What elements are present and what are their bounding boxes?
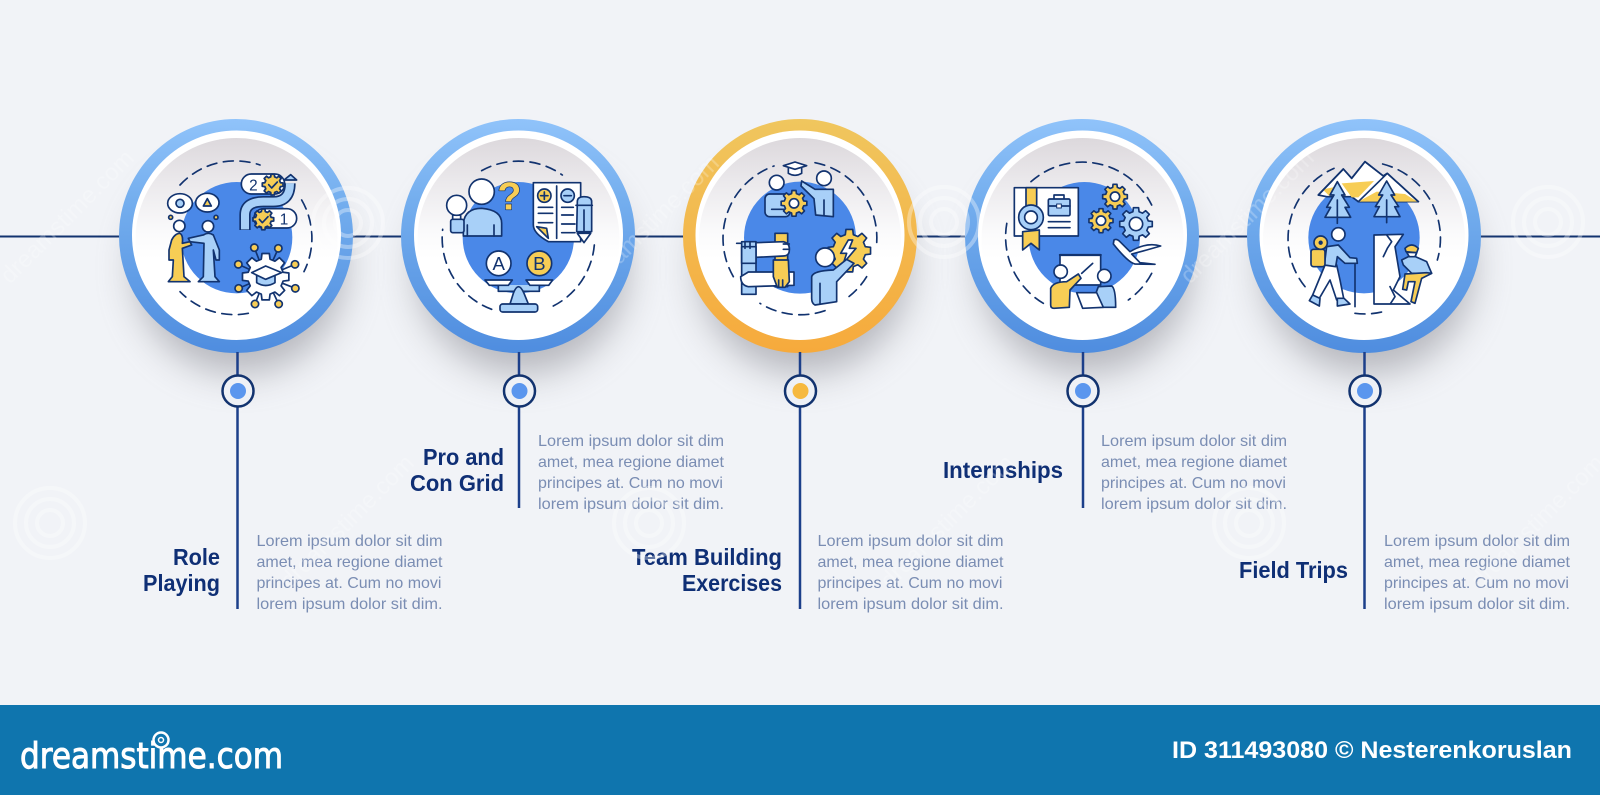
panel: internships xyxy=(943,119,1288,513)
logo: dreamstime: dreamstime.com xyxy=(20,736,283,777)
outer ring xyxy=(965,119,1199,353)
connector line xyxy=(518,352,520,508)
icon: role playing people, ranked path and gear: 2 xyxy=(249,178,258,195)
outer ring xyxy=(1247,119,1481,353)
heading: role playing: Role xyxy=(173,544,220,570)
panel: field trips xyxy=(1239,119,1571,613)
inner disc xyxy=(696,130,904,340)
text: dreamstime.com xyxy=(580,150,725,294)
description: principes at. Cum no movi xyxy=(1384,575,1569,592)
inner disc xyxy=(978,130,1187,340)
description: amet, mea regione diamet xyxy=(818,554,1004,571)
outer ring xyxy=(119,119,353,353)
connector line xyxy=(1363,352,1366,609)
icon: role playing people, ranked path and gear: 1 xyxy=(280,212,288,229)
connector line xyxy=(1082,352,1084,508)
circle shadow xyxy=(980,162,1192,374)
description: lorem ipsum dolor sit dim. xyxy=(538,496,724,513)
connector line xyxy=(236,352,239,609)
heading: internships: Internships xyxy=(943,457,1063,483)
timeline horizontal line xyxy=(0,236,1600,238)
description: amet, mea regione diamet xyxy=(1101,454,1288,471)
description: lorem ipsum dolor sit dim. xyxy=(1101,496,1287,513)
text: dreamstime.com xyxy=(1175,145,1320,289)
description: amet, mea regione diamet xyxy=(256,554,443,571)
circle shadow xyxy=(1262,162,1474,374)
description: Lorem ipsum dolor sit dim xyxy=(1384,533,1570,550)
heading: team building exercises: Exercises xyxy=(682,570,782,596)
description: Lorem ipsum dolor sit dim xyxy=(538,433,724,450)
heading: team building exercises: Team Building xyxy=(632,544,782,570)
description: lorem ipsum dolor sit dim. xyxy=(818,596,1004,613)
panel: role playing xyxy=(119,119,443,613)
marker node xyxy=(1350,376,1380,406)
outer ring xyxy=(683,119,917,353)
icon: person, pros and cons list, scales xyxy=(442,161,594,312)
description: lorem ipsum dolor sit dim. xyxy=(1384,596,1570,613)
inner disc xyxy=(132,130,341,340)
inner disc xyxy=(1260,130,1468,340)
icon: person, pros and cons list, scales: B xyxy=(533,253,546,274)
footer bar xyxy=(0,705,1600,795)
description: amet, mea regione diamet xyxy=(538,454,725,471)
icon: team, joined hands, gears xyxy=(723,162,877,315)
icon: mountains, hiker and climber xyxy=(1288,162,1440,314)
heading: pro and con grid: Pro and xyxy=(423,444,504,470)
connector line xyxy=(799,352,801,609)
marker node xyxy=(222,376,254,406)
inner disc xyxy=(414,130,623,340)
icon: person, pros and cons list, scales: ? xyxy=(497,174,521,218)
description: principes at. Cum no movi xyxy=(1101,475,1286,492)
description: lorem ipsum dolor sit dim. xyxy=(256,596,442,613)
description: principes at. Cum no movi xyxy=(256,575,442,592)
description: Lorem ipsum dolor sit dim xyxy=(1101,433,1287,450)
circle shadow xyxy=(698,162,910,374)
icon: person, pros and cons list, scales: A xyxy=(492,253,505,274)
heading: field trips: Field Trips xyxy=(1239,557,1348,583)
description: principes at. Cum no movi xyxy=(818,575,1002,592)
description: principes at. Cum no movi xyxy=(538,475,723,492)
description: Lorem ipsum dolor sit dim xyxy=(256,533,442,550)
circle shadow xyxy=(134,162,346,374)
panel: team building exercises xyxy=(632,119,1004,613)
icon: role playing people, ranked path and gear xyxy=(168,161,312,315)
marker node xyxy=(504,376,535,406)
description: Lorem ipsum dolor sit dim xyxy=(818,533,1004,550)
heading: role playing: Playing xyxy=(143,570,220,596)
text: dreamstime.com xyxy=(275,450,420,594)
icon: certificate, gears, mentor at whiteboard xyxy=(1006,162,1161,308)
credit: ID 311493080 © Nesterenkoruslan xyxy=(1172,737,1572,764)
marker node xyxy=(785,376,816,406)
marker node xyxy=(1068,376,1098,406)
text: dreamstime.com xyxy=(875,450,1020,594)
heading: pro and con grid: Con Grid xyxy=(410,470,504,496)
panel: pro and con grid xyxy=(401,119,725,513)
circle shadow xyxy=(416,162,628,374)
outer ring xyxy=(401,119,635,353)
description: amet, mea regione diamet xyxy=(1384,554,1571,571)
